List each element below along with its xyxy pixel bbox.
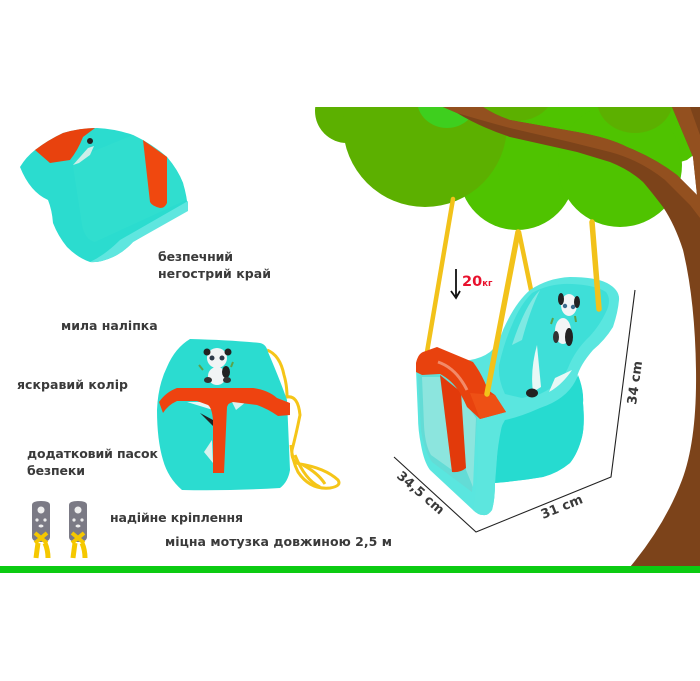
weight label: 20кг [462, 274, 493, 290]
dimension label width: 31 cm [539, 492, 585, 523]
front bar leg [440, 375, 466, 472]
green bottom stripe [0, 566, 700, 573]
seat belt caption: безпеки [27, 463, 85, 478]
mounting brackets [32, 501, 87, 558]
seat silhouette [416, 277, 619, 515]
safe edge detail image [20, 128, 188, 262]
bright colour caption: яскравий колір [17, 377, 128, 392]
side rope [267, 350, 339, 488]
front view swing [157, 339, 339, 490]
seat back inner [499, 284, 609, 398]
safe edge caption: безпечний [158, 249, 233, 264]
dimension label height: 34 cm [625, 360, 646, 406]
seat belt caption: додатковий пасок [27, 446, 159, 461]
sticker caption: мила наліпка [61, 318, 158, 333]
safe edge caption: негострий край [158, 266, 271, 281]
dimension label depth: 34,5 cm [393, 469, 447, 518]
main swing seat [416, 277, 619, 515]
seat lower body [495, 375, 584, 483]
panda sticker [551, 293, 580, 346]
mount caption: надійне кріплення [110, 510, 243, 525]
main swing front ropes [487, 222, 599, 394]
seat belt caption [27, 446, 159, 478]
front rim [473, 414, 505, 515]
front bar [416, 347, 506, 419]
dimension lines [394, 290, 635, 532]
inner highlights [187, 402, 213, 410]
safe edge caption [158, 249, 271, 281]
tree canopy [315, 107, 692, 230]
main swing back ropes [427, 199, 531, 352]
weight arrow [451, 269, 493, 298]
rope caption: міцна мотузка довжиною 2,5 м [165, 534, 392, 549]
panda sticker [199, 348, 233, 385]
side panel [418, 375, 477, 492]
seat highlights [532, 345, 541, 392]
tree trunk and branch [443, 107, 700, 567]
seat body [157, 339, 290, 490]
T-shaped bar [159, 388, 290, 473]
